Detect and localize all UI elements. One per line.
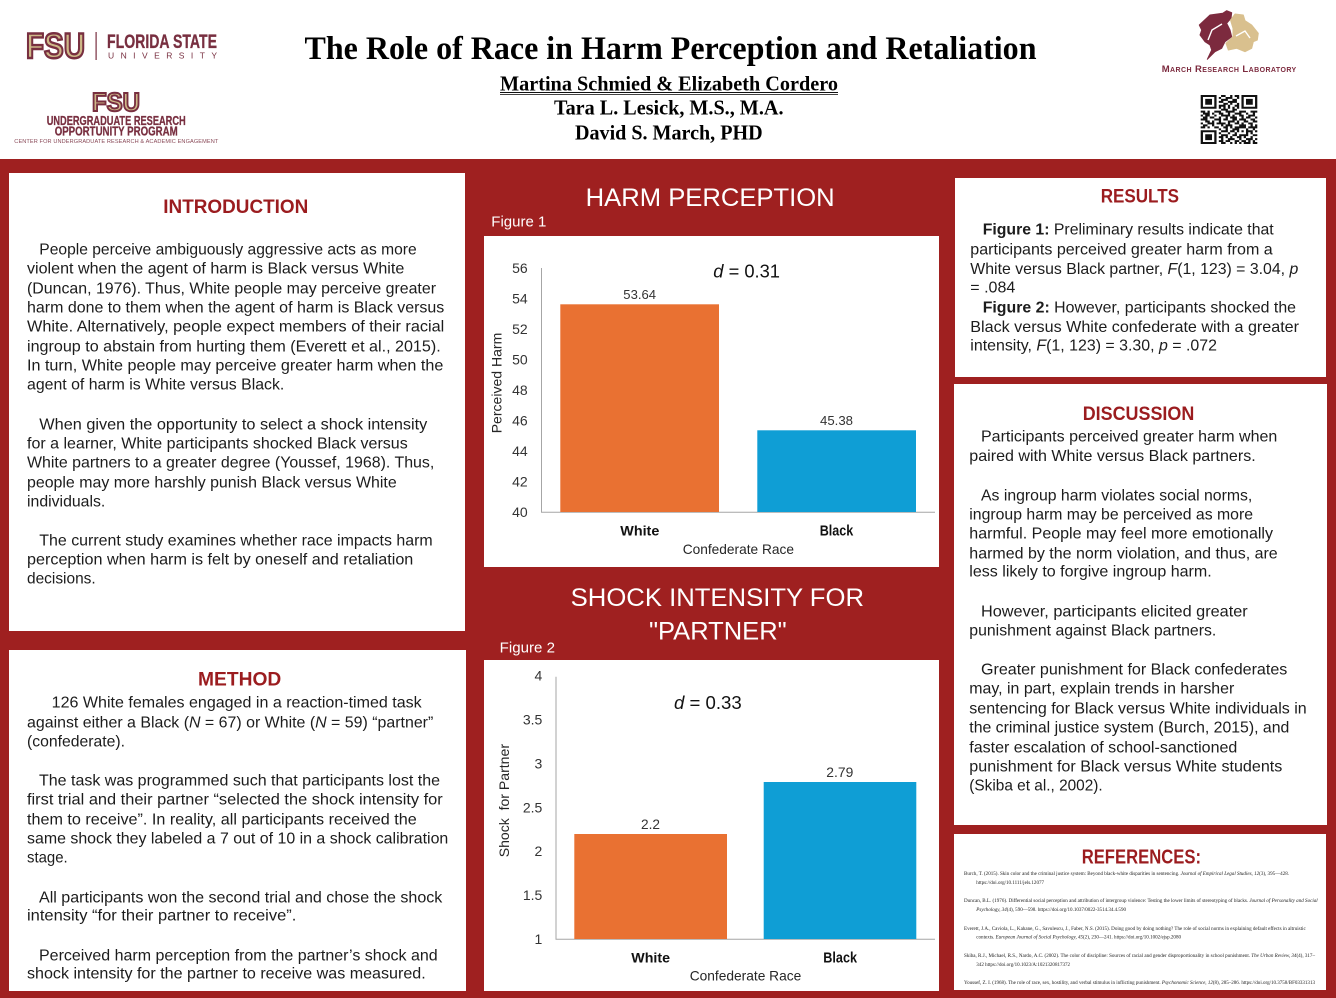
icon: March Research Laboratory brain logo: March Research Laboratory (1162, 64, 1297, 75)
icon: QR code (1201, 96, 1257, 143)
text block: introduction body: people may more harshly punish Black versus White (27, 474, 397, 491)
text block: results body: Black versus White confederate with a greater (970, 319, 1300, 336)
text block: results body: intensity, F(1, 123) = 3.30, p = .072 (970, 338, 1217, 354)
bar chart: perceived harm (484, 236, 939, 567)
text block: introduction body: White. Alternatively, people expect members of their racial (27, 319, 444, 336)
text block: introduction body: (Duncan, 1976). Thus, White people may perceive greater (27, 280, 437, 297)
y axis ticks: 54 (512, 290, 528, 306)
bar: white, 53.64 (560, 304, 719, 512)
y axis ticks: 48 (512, 382, 528, 398)
text block: reference list: Everett, J.A., Caviola, L., Kahane, G., Savulescu, J., Faber, N.S. (2015). Doing good by doing nothing? The role of social norms in explaining default effects in altruistic (964, 925, 1306, 932)
text block: method body: against either a Black (N = 67) or White (N = 59) “partner” (27, 715, 433, 732)
y axis ticks: 3 (535, 756, 543, 772)
text block: introduction body: The current study examines whether race impacts harm (39, 532, 433, 549)
y axis ticks: 56 (512, 260, 528, 276)
x axis title: Confederate Race (683, 541, 794, 557)
text block: results body (970, 222, 1300, 354)
header: undergraduate research program logo: CENTER FOR UNDERGRADUATE RESEARCH & ACADEMIC ENGAGEMENT (14, 139, 219, 145)
y axis ticks: 44 (512, 443, 528, 459)
category label: white: White (620, 523, 660, 539)
text block: method body: shock intensity for the partner to receive was measured. (27, 965, 426, 982)
category label: white: White (631, 950, 670, 966)
text block: introduction body: decisions. (27, 571, 96, 588)
bar: black, 45.38 (757, 430, 916, 512)
text block: discussion body: paired with White versus Black partners. (969, 448, 1256, 465)
y axis ticks: 52 (512, 321, 528, 337)
text block: introduction body: individuals. (27, 494, 105, 511)
heading: references: REFERENCES: (1082, 846, 1201, 868)
text block: method body: The task was programmed such that participants lost the (39, 773, 440, 790)
text block: discussion body: (Skiba et al., 2002). (969, 777, 1103, 794)
text block: reference list: Youssef, Z. I. (1968). The role of race, sex, hostility, and verbal stimulus in inflicting punishment. Psychonomic Science, 12(8), 285–286. https://doi.org/10.3758/BF03331313 (964, 979, 1315, 986)
authors (500, 72, 838, 144)
y axis ticks: 50 (512, 352, 528, 368)
label: figure 1: Figure 1 (491, 215, 546, 231)
authors: Martina Schmied & Elizabeth Cordero (500, 72, 838, 96)
text block: results body: participants perceived greater harm from a (970, 242, 1273, 258)
text block: discussion body: faster escalation of school-sanctioned (969, 740, 1237, 757)
text block: introduction body: agent of harm is White versus Black. (27, 377, 284, 394)
bar: white, 2.2 (574, 834, 727, 939)
heading: shock intensity for partner (571, 584, 864, 645)
text block: discussion body: punishment for Black versus White students (969, 759, 1282, 776)
text block: method body: stage. (27, 850, 68, 867)
text block: results body: Figure 1: Preliminary results indicate that (983, 222, 1274, 238)
text block: introduction body: In turn, White people may perceive greater harm when the (27, 358, 443, 375)
header: undergraduate research program logo: OPPORTUNITY PROGRAM (55, 124, 178, 139)
value label: 2.2: 2.2 (641, 817, 660, 832)
text block: reference list: contexts. European Journal of Social Psychology, 45(2), 230—241. https://doi.org/10.1002/ejsp.2080 (976, 934, 1181, 941)
value label: 53.64: 53.64 (623, 288, 656, 302)
text block: discussion body: harmful. People may feel more emotionally (969, 526, 1273, 543)
header: FSU logo (26, 27, 217, 66)
text block: discussion body: As ingroup harm violates social norms, (981, 487, 1252, 504)
icon: March Research Laboratory brain logo (1162, 11, 1297, 75)
text block: introduction body: People perceive ambiguously aggressive acts as more (39, 241, 417, 258)
y axis ticks: 4 (535, 668, 543, 684)
y axis ticks: 3.5 (523, 712, 543, 728)
panel: references (954, 834, 1326, 990)
panel: method (9, 650, 466, 991)
effect size: d = 0.33 (674, 693, 742, 713)
text block: results body: White versus Black partner, F(1, 123) = 3.04, p (970, 261, 1298, 278)
text block: discussion body: sentencing for Black versus White individuals in (969, 701, 1307, 718)
y axis ticks (523, 668, 543, 947)
text block: introduction body: violent when the agent of harm is Black versus White (27, 261, 404, 278)
text block: discussion body: less likely to forgive ingroup harm. (969, 564, 1212, 581)
y axis ticks: 1 (535, 931, 543, 947)
y axis ticks: 1.5 (523, 887, 543, 903)
text block: discussion body: Participants perceived greater harm when (981, 429, 1277, 446)
header: undergraduate research program logo: UNDERGRADUATE RESEARCH (47, 113, 186, 128)
y axis ticks: 46 (512, 412, 528, 428)
effect size: d = 0.31 (713, 262, 780, 282)
category label: black: Black (820, 523, 854, 540)
text block: discussion body: punishment against Black partners. (969, 622, 1216, 639)
text block: introduction body: When given the opportunity to select a shock intensity (39, 416, 427, 433)
text block: discussion body: Greater punishment for Black confederates (981, 661, 1287, 678)
text block: introduction body: for a learner, White participants shocked Black versus (27, 436, 408, 453)
heading: method: METHOD (198, 670, 281, 691)
text block: introduction body: harm done to them when the agent of harm is Black versus (27, 300, 444, 317)
y axis ticks: 2 (535, 843, 543, 859)
header: FSU logo: FSU (26, 27, 85, 66)
title: The Role of Race in Harm Perception and Retaliation (304, 31, 1036, 67)
text block: discussion body: the criminal justice system (Burch, 2015), and (969, 720, 1289, 737)
text block: discussion body (969, 429, 1307, 794)
text block: reference list: Duncan, B.L. (1976). Differential social perception and attribution of intergroup violence: Testing the lower limits of stereotyping of blacks. Journal of Personality and Social (964, 897, 1318, 904)
text block: discussion body: harmed by the norm violation, and thus, are (969, 545, 1278, 562)
text block: discussion body: may, in part, explain trends in harsher (969, 680, 1235, 697)
heading: introduction: INTRODUCTION (163, 197, 308, 218)
text block: introduction body: White partners to a greater degree (Youssef, 1968). Thus, (27, 455, 434, 472)
text block: method body: same shock they labeled a 7 out of 10 in a shock calibration (27, 831, 448, 848)
x axis title: Confederate Race (690, 968, 801, 984)
bar chart: shock for partner (484, 660, 939, 991)
text block: introduction body (27, 241, 444, 588)
authors: Tara L. Lesick, M.S., M.A. (554, 96, 784, 120)
panel: introduction (9, 173, 465, 631)
text block: reference list: Psychology, 34(4), 590—598. https://doi.org/10.1037/0022-3514.34.4.590 (975, 906, 1126, 913)
text block: discussion body: However, participants elicited greater (981, 603, 1248, 620)
text block: method body: 126 White females engaged in a reaction-timed task (52, 695, 423, 712)
text block: introduction body: perception when harm is felt by oneself and retaliation (27, 552, 413, 569)
text block: reference list: https://doi.org/10.1111/jels.12077 (976, 880, 1044, 886)
text block: method body: first trial and their partner “selected the shock intensity for (27, 792, 443, 809)
text block: results body: Figure 2: However, participants shocked the (983, 300, 1296, 316)
text block: method body: (confederate). (27, 734, 125, 751)
text block: method body (27, 695, 448, 982)
text block: discussion body: ingroup harm may be perceived as more (969, 507, 1253, 524)
value label: 45.38: 45.38 (820, 414, 853, 428)
heading: shock intensity for partner: "PARTNER" (649, 617, 787, 645)
text block: method body: intensity “for their partner to receive”. (27, 908, 296, 925)
panel: results (955, 178, 1326, 377)
authors: David S. March, PHD (575, 120, 763, 144)
text block: reference list: 342 https://doi.org/10.1023/A:1021320817372 (976, 962, 1070, 968)
text block: reference list: Burch, T. (2015). Skin color and the criminal justice system: Beyond black-white disparities in sentencing. Journal of Empirical Legal Studies, 12(3), 395—428. (964, 870, 1290, 877)
header: undergraduate research program logo (14, 87, 219, 145)
text block: reference list (964, 870, 1318, 986)
category label: black: Black (823, 950, 858, 967)
bar: black, 2.79 (764, 782, 916, 939)
y axis title: Shock for Partner (496, 744, 512, 857)
header: FSU logo: UNIVERSITY (108, 50, 217, 60)
text block: introduction body: ingroup to abstain from hurting them (Everett et al., 2015). (27, 338, 441, 355)
header: FSU logo: FLORIDA STATE (107, 32, 217, 53)
y axis ticks: 42 (512, 474, 528, 490)
heading: discussion: DISCUSSION (1083, 404, 1194, 425)
text block: method body: them to receive”. In reality, all participants received the (27, 812, 417, 829)
header: undergraduate research program logo: FSU (92, 87, 140, 117)
heading: harm perception: HARM PERCEPTION (586, 184, 835, 212)
panel: discussion (954, 384, 1327, 825)
heading: shock intensity for partner: SHOCK INTENSITY FOR (571, 584, 864, 612)
text block: reference list: Skiba, R.J., Michael, R.S., Nardo, A.C. (2002). The color of discipline: Sources of racial and gender disproportionality in school punishment. The Urban Review, 34(4), 317– (964, 952, 1315, 959)
text block: method body: All participants won the second trial and chose the shock (39, 890, 443, 907)
y axis ticks: 40 (512, 504, 528, 520)
y axis title: Perceived Harm (488, 333, 504, 433)
label: figure 2: Figure 2 (500, 641, 555, 657)
y axis ticks: 2.5 (523, 799, 543, 815)
value label: 2.79: 2.79 (826, 765, 853, 780)
text block: results body: = .084 (970, 280, 1015, 296)
y axis ticks (512, 260, 528, 520)
text block: method body: Perceived harm perception from the partner’s shock and (39, 948, 438, 965)
heading: results: RESULTS (1101, 187, 1179, 208)
